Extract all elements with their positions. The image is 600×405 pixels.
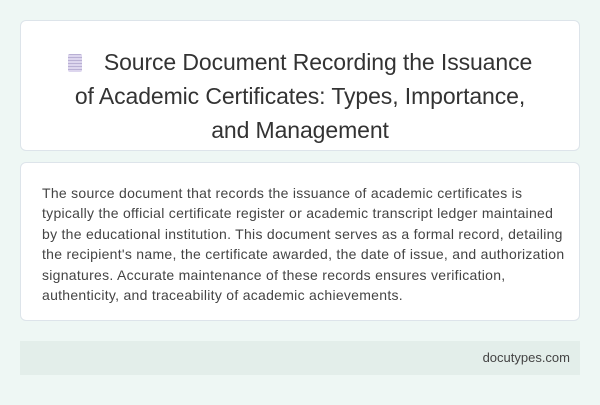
panel: header bbox=[20, 20, 580, 151]
title bbox=[68, 49, 532, 143]
text block: by the educational institution. This document serves as a formal record, detailing bbox=[42, 226, 563, 242]
title: of Academic Certificates: Types, Importance, bbox=[75, 83, 525, 109]
text block: typically the official certificate register or academic transcript ledger maintained bbox=[42, 205, 553, 221]
text block: signatures. Accurate maintenance of these records ensures verification, bbox=[42, 267, 505, 283]
title: Source Document Recording the Issuance bbox=[104, 49, 532, 75]
text block: the recipient's name, the certificate awarded, the date of issue, and authorization bbox=[42, 246, 564, 262]
text block: authenticity, and traceability of academic achievements. bbox=[42, 287, 403, 303]
panel: description bbox=[20, 162, 580, 321]
title: and Management bbox=[211, 117, 389, 143]
text block bbox=[42, 185, 564, 303]
text block: The source document that records the issuance of academic certificates is bbox=[42, 185, 522, 201]
footer bbox=[20, 341, 580, 375]
footer: docutypes.com bbox=[483, 350, 570, 365]
icon: document bbox=[68, 54, 82, 72]
